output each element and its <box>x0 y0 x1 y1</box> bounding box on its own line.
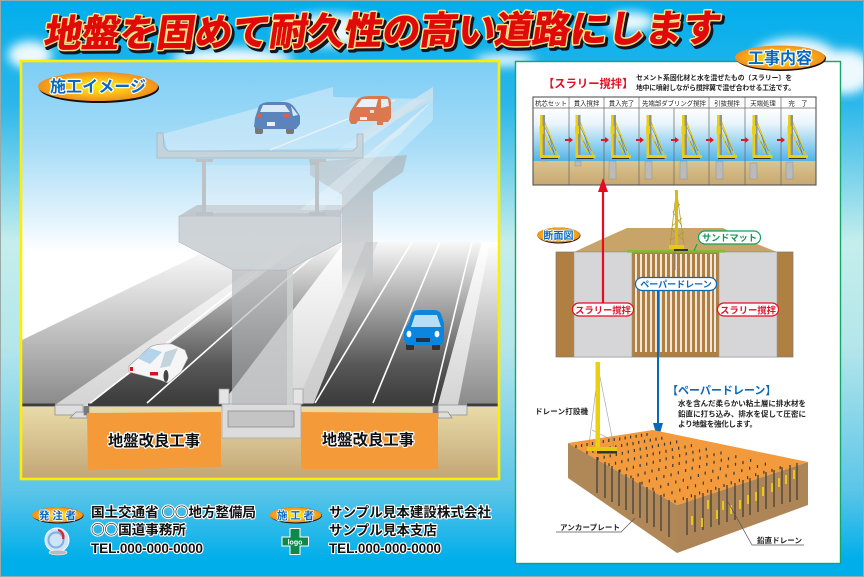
ground improvement block left <box>87 412 221 470</box>
badge: contractor: 施工者 <box>277 509 314 522</box>
panel: construction image <box>21 61 499 479</box>
bridge deck and girders <box>157 87 433 216</box>
heading: paper drain: 【ペーパードレーン】 <box>667 384 776 397</box>
label: paper drain: ペーパードレーン <box>640 280 712 290</box>
badge: orderer: 発注者 <box>39 509 76 522</box>
label: sand mat: サンドマット <box>702 233 757 243</box>
contractor block <box>270 504 492 556</box>
text: paper drain description: 水を含んだ柔らかい粘土層に排水材を <box>678 398 806 408</box>
panel border <box>21 61 499 479</box>
cross-section diagram <box>556 190 793 357</box>
label: drain driver: ドレーン打設機 <box>535 406 588 416</box>
badge: construction details: 工事内容 <box>748 48 812 68</box>
process table: 引抜撹拌 <box>714 98 740 108</box>
car: blue hatchback <box>404 310 444 350</box>
text: slurry description <box>636 73 795 92</box>
ground layer <box>22 407 498 478</box>
process table: 天端処理 <box>750 98 776 108</box>
title: 地盤を固めて耐久性の高い道路にします <box>42 7 724 55</box>
road surface <box>22 242 498 405</box>
centre median foundation <box>219 389 303 438</box>
roadside rails <box>55 405 467 418</box>
badge: construction image <box>38 72 159 103</box>
drain driving machine <box>587 362 617 454</box>
soil block diagram <box>568 430 808 553</box>
text: contractor details <box>329 504 492 556</box>
process table: 先端部ダブリング撹拌 <box>642 98 707 108</box>
badge: orderer <box>32 508 84 524</box>
badge: construction image: 施工イメージ <box>50 78 146 96</box>
orderer block <box>32 501 256 556</box>
heading: slurry mixing: 【スラリー撹拌】 <box>543 76 633 90</box>
badge: contractor <box>270 508 322 524</box>
label: slurry mixing right: スラリー撹拌 <box>720 304 776 315</box>
icon: ministry logo <box>45 528 69 555</box>
front pier column <box>179 205 345 405</box>
process table <box>533 97 816 185</box>
title: 地盤を固めて耐久性の高い道路にします <box>42 7 724 55</box>
process table: 完 了 <box>788 100 808 108</box>
ground improvement block right: 地盤改良工事 <box>322 430 414 449</box>
text: orderer details: TEL.000-000-0000 <box>91 541 203 556</box>
icon: contractor logo: logo <box>288 540 302 546</box>
label: sand mat <box>694 231 760 251</box>
text: slurry description: セメント系固化材と水を混ぜたもの〔スラリー〕を <box>636 73 792 82</box>
badge: cross-section <box>537 228 580 244</box>
car: red on deck <box>349 96 391 125</box>
panel: construction details <box>516 46 840 564</box>
title: 地盤を固めて耐久性の高い道路にします <box>44 10 726 57</box>
label: vertical drain <box>728 502 804 545</box>
badge: construction details <box>735 46 826 71</box>
blue arrow: paper drain <box>653 291 663 440</box>
red arrow: slurry <box>598 178 608 304</box>
car: blue rear view on deck <box>254 102 300 134</box>
label: anchor plate: アンカープレート <box>560 523 620 532</box>
badge: cross-section: 断面図 <box>544 229 574 242</box>
label: paper drain <box>636 278 716 290</box>
back pier <box>310 155 407 300</box>
sky of construction image <box>21 61 499 479</box>
text: slurry description: 地中に噴射しながら撹拌翼で混ぜ合わせる工法です。 <box>636 83 795 92</box>
text: paper drain description: より地盤を強化します。 <box>678 418 757 428</box>
text: paper drain description <box>678 398 806 428</box>
text: contractor details: サンプル見本支店 <box>329 522 437 538</box>
process table: 貫入撹拌 <box>574 98 600 108</box>
text: orderer details <box>91 501 256 556</box>
label: vertical drain: 鉛直ドレーン <box>757 535 802 545</box>
text: orderer details: ○○国道事務所 <box>91 518 186 538</box>
text: contractor details: サンプル見本建設株式会社 <box>329 504 492 520</box>
ground improvement block right <box>301 412 438 469</box>
label: slurry mixing left: スラリー撹拌 <box>575 304 631 315</box>
text: contractor details: TEL.000-000-0000 <box>329 541 441 556</box>
text: orderer details: 国土交通省 ○○地方整備局 <box>91 501 256 521</box>
car: white sedan <box>129 344 188 383</box>
ground improvement block left: 地盤改良工事 <box>108 431 200 450</box>
label: anchor plate <box>556 518 635 532</box>
text: paper drain description: 鉛直に打ち込み、排水を促して圧密に <box>678 408 806 418</box>
icon: contractor logo <box>282 528 308 554</box>
process table: 杭芯セット <box>535 98 567 108</box>
process table: 貫入完了 <box>609 100 634 108</box>
